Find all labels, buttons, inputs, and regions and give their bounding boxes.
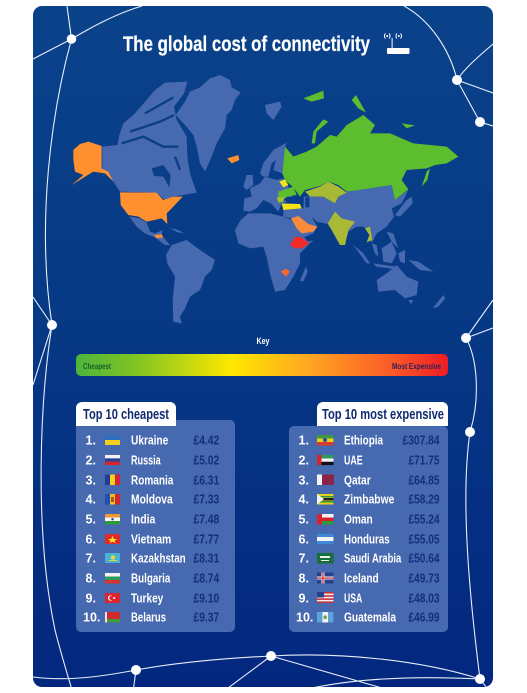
row: Russia: 2. <box>86 454 96 468</box>
row: Ukraine: 1. <box>86 434 96 448</box>
row: Guatemala <box>296 610 440 624</box>
row: USA: 9. <box>298 592 309 606</box>
row: UAE: 2. <box>298 454 309 468</box>
row: Iceland: Iceland <box>344 572 379 586</box>
row: Bulgaria: Bulgaria <box>131 572 171 586</box>
row: Moldova: Moldova <box>131 492 174 506</box>
row: India: £7.48 <box>194 512 219 526</box>
row: Russia: £5.02 <box>194 454 219 468</box>
world map <box>72 75 458 323</box>
row: Ukraine <box>86 434 219 448</box>
row: Zimbabwe: 4. <box>298 492 309 506</box>
row: Oman: £55.24 <box>408 512 440 526</box>
row: Turkey <box>86 592 219 606</box>
row: Ethiopia: 1. <box>298 434 309 448</box>
row: UAE <box>298 454 440 468</box>
row: Bulgaria <box>86 572 219 586</box>
row: Romania: 3. <box>86 474 96 488</box>
row: Honduras: Honduras <box>344 532 390 546</box>
row: Moldova <box>86 492 219 506</box>
row: UAE: £71.75 <box>408 454 440 468</box>
row: Zimbabwe: Zimbabwe <box>344 492 394 506</box>
row: USA <box>298 592 440 606</box>
row: Belarus <box>83 610 219 624</box>
colour key gradient bar: Most Expensive <box>392 362 441 371</box>
row: Honduras: 6. <box>298 532 309 546</box>
row: Guatemala: Guatemala <box>344 610 397 624</box>
row: Iceland: 8. <box>298 572 309 586</box>
row: Saudi Arabia: 7. <box>298 552 309 566</box>
row: Qatar: 3. <box>298 474 309 488</box>
row: Romania <box>86 474 219 488</box>
row: Belarus: 10. <box>83 610 100 624</box>
row: Moldova: 4. <box>86 492 96 506</box>
row: India: India <box>131 512 156 526</box>
row: Vietnam: Vietnam <box>131 532 171 546</box>
row: Ethiopia: £307.84 <box>402 434 440 448</box>
row: Belarus: Belarus <box>131 610 166 624</box>
row: USA: £48.03 <box>408 592 440 606</box>
row: Guatemala: 10. <box>296 610 313 624</box>
row: Oman <box>298 512 440 526</box>
panel: top 10 cheapest <box>76 402 235 632</box>
row: Turkey: 9. <box>86 592 96 606</box>
row: Saudi Arabia: Saudi Arabia <box>344 552 402 566</box>
heading: top 10 most expensive <box>317 402 448 426</box>
row: Russia: Russia <box>131 454 161 468</box>
row: Iceland <box>298 572 440 586</box>
row: Guatemala: £46.99 <box>408 610 440 624</box>
colour key gradient bar: Cheapest <box>83 362 111 371</box>
row: Kazakhstan: Kazakhstan <box>131 552 186 566</box>
row: Zimbabwe <box>298 492 440 506</box>
row: Ethiopia <box>298 434 440 448</box>
row: Vietnam: £7.77 <box>194 532 219 546</box>
colour key gradient bar <box>76 354 448 376</box>
row: Bulgaria: £8.74 <box>194 572 219 586</box>
row: Bulgaria: 8. <box>86 572 96 586</box>
row: UAE: UAE <box>344 454 363 468</box>
row: Romania: £6.31 <box>194 474 219 488</box>
row: Turkey: Turkey <box>131 592 163 606</box>
row: Qatar: Qatar <box>344 474 371 488</box>
panel: top 10 most expensive <box>289 402 448 632</box>
row: Qatar <box>298 474 440 488</box>
row: Kazakhstan: 7. <box>86 552 96 566</box>
row: Vietnam <box>86 532 219 546</box>
row: India <box>86 512 219 526</box>
row: Qatar: £64.85 <box>408 474 440 488</box>
row: Kazakhstan: £8.31 <box>194 552 219 566</box>
heading: top 10 cheapest <box>76 402 176 426</box>
row: Honduras <box>298 532 440 546</box>
row: Ukraine: £4.42 <box>194 434 219 448</box>
row: India: 5. <box>86 512 96 526</box>
title: The global cost of connectivity <box>123 32 370 56</box>
row: Turkey: £9.10 <box>194 592 219 606</box>
heading: top 10 cheapest: Top 10 cheapest <box>83 407 169 423</box>
row: Zimbabwe: £58.29 <box>408 492 440 506</box>
row: Iceland: £49.73 <box>408 572 440 586</box>
row: Romania: Romania <box>131 474 174 488</box>
heading: top 10 most expensive: Top 10 most expensive <box>322 407 444 423</box>
key label: Key <box>256 336 270 347</box>
Kazakhstan and India <box>305 182 372 245</box>
row: Saudi Arabia: £50.64 <box>408 552 440 566</box>
row: Saudi Arabia <box>298 552 440 566</box>
ocean channels <box>122 97 180 170</box>
row: Ethiopia: Ethiopia <box>344 434 384 448</box>
row: Oman: 5. <box>298 512 309 526</box>
row: Vietnam: 6. <box>86 532 96 546</box>
icon: wifi router <box>384 34 410 54</box>
row: Russia <box>86 454 219 468</box>
row: Ukraine: Ukraine <box>131 434 168 448</box>
row: Belarus: £9.37 <box>194 610 219 624</box>
row: USA: USA <box>344 592 362 606</box>
row: Moldova: £7.33 <box>194 492 219 506</box>
row: Oman: Oman <box>344 512 373 526</box>
row: Honduras: £55.05 <box>408 532 440 546</box>
row: Kazakhstan <box>86 552 219 566</box>
